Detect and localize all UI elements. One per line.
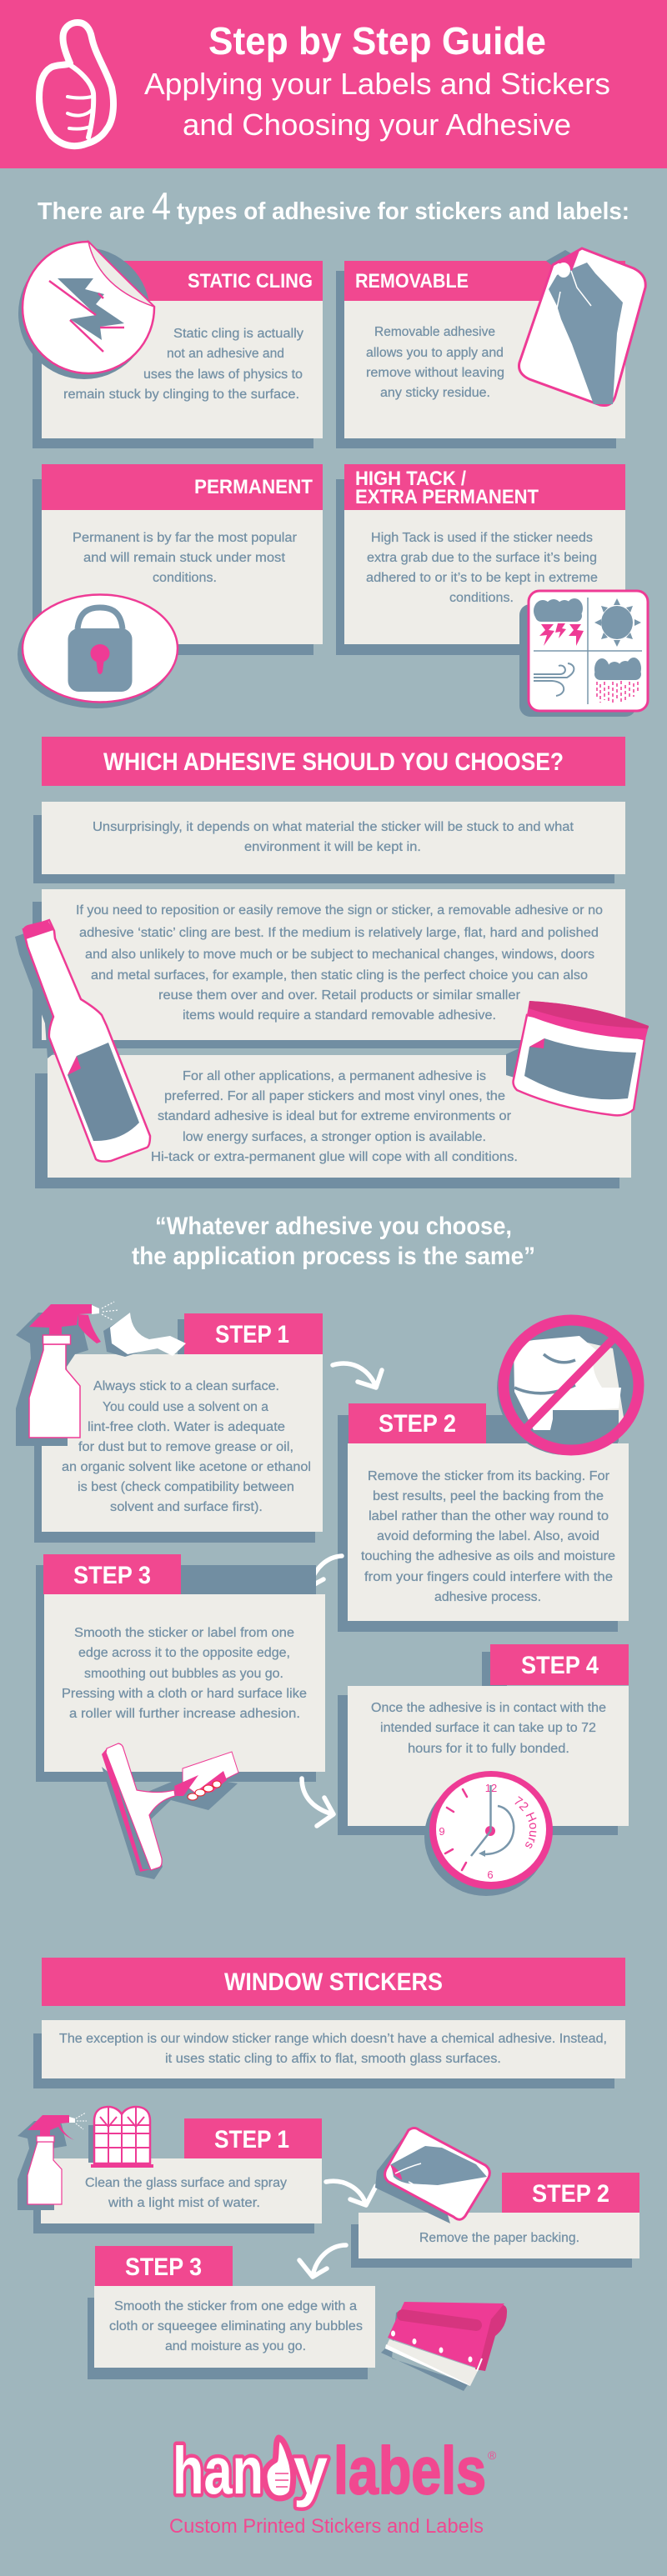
icon: cloth — [103, 1313, 186, 1357]
text: step 2: Remove the sticker from its backing. For — [368, 1469, 609, 1483]
heading: high tack — [355, 468, 539, 508]
text: step 2: adhesive process. — [434, 1590, 541, 1604]
icon: bottle — [15, 920, 150, 1162]
arrow: step 1 to 2 — [333, 1363, 382, 1388]
text: step 4 — [371, 1701, 606, 1756]
text: window step 2: Remove the paper backing. — [419, 2231, 579, 2245]
quote — [132, 1213, 535, 1270]
panel: step 3 — [36, 1554, 325, 1879]
heading: four types: There are — [38, 198, 145, 225]
text: step 3: a roller will further increase adhesion. — [69, 1707, 300, 1721]
text: window step 1 — [85, 2176, 287, 2210]
icon: small spray bottle — [18, 2113, 87, 2210]
text: step 2 — [361, 1469, 615, 1604]
heading: high tack: HIGH TACK / — [355, 468, 466, 490]
text: high tack: conditions. — [449, 591, 514, 605]
text: permanent: and will remain stuck under most — [83, 551, 286, 565]
text: removable: allows you to apply and — [366, 346, 504, 360]
panel: unsurprisingly — [33, 802, 625, 883]
heading: high tack: EXTRA PERMANENT — [355, 486, 539, 508]
text: step 3: smoothing out bubbles as you go. — [84, 1667, 283, 1681]
text: window step 3: Smooth the sticker from one edge with a — [114, 2299, 357, 2313]
text: removable: Removable adhesive — [374, 325, 495, 339]
icon: arched window — [88, 2107, 153, 2168]
arrow: step 2 to 3 — [294, 1556, 342, 1588]
text: static cling: remain stuck by clinging to the surface. — [63, 388, 299, 402]
panel: window sticker exception: it uses static cling to affix to flat, smooth glass surfaces. — [165, 2052, 501, 2066]
panel: permanent guidance: standard adhesive is ideal but for extreme environments or — [158, 1109, 511, 1123]
panel: permanent — [18, 464, 323, 708]
arrow: step 3 to 4 — [302, 1778, 334, 1826]
text: removable — [366, 325, 504, 400]
text: static cling: not an adhesive and — [167, 347, 284, 361]
icon: spray bottle — [16, 1302, 118, 1446]
logo: handy labels: ® — [488, 2448, 497, 2462]
text: removable: remove without leaving — [366, 366, 504, 380]
panel: unsurprisingly: Unsurprisingly, it depends on what material the sticker will be stuck to and what — [93, 820, 574, 834]
panel: window step 2 — [351, 2128, 639, 2268]
heading: window step 2: STEP 2 — [532, 2180, 609, 2208]
text: step 3: Pressing with a cloth or hard surface like — [62, 1687, 307, 1701]
icon: clock 72 hours: 72 Hours — [514, 1796, 537, 1848]
text: step 2: avoid deforming the label. Also, avoid — [377, 1529, 599, 1543]
text: step 1: an organic solvent like acetone or ethanol — [62, 1460, 311, 1474]
section heading: which adhesive: WHICH ADHESIVE SHOULD YOU CHOOSE? — [103, 748, 564, 776]
icon: storm — [534, 598, 584, 646]
icon: squeegee and hand — [102, 1743, 238, 1879]
panel: permanent guidance — [35, 1055, 631, 1188]
logo: handy labels — [173, 2433, 497, 2508]
heading: window step 3: STEP 3 — [125, 2253, 202, 2281]
title — [144, 19, 610, 142]
text: static cling: Static cling is actually — [173, 327, 303, 341]
heading: step 4: STEP 4 — [521, 1652, 599, 1679]
section heading: window stickers — [42, 1958, 625, 2006]
text: step 1: for dust but to remove grease or oil, — [78, 1440, 293, 1454]
arrow: window step 1 to 2 — [326, 2181, 376, 2205]
text: step 3: Smooth the sticker or label from one — [74, 1626, 294, 1640]
text: step 1 — [62, 1379, 311, 1514]
panel: step 4 — [338, 1644, 629, 1896]
panel: removable guidance: and also unlikely to move much or be subject to mechanical changes, windows, doors — [85, 948, 594, 962]
text: step 1: You could use a solvent on a — [103, 1400, 268, 1414]
icon: logo thumb — [264, 2438, 293, 2498]
tagline: Custom Printed Stickers and Labels — [169, 2515, 484, 2538]
panel: window step 3 — [88, 2246, 375, 2379]
text: step 4: intended surface it can take up to 72 — [380, 1721, 596, 1735]
text: permanent: conditions. — [153, 571, 217, 585]
panel: removable guidance: items would require a standard removable adhesive. — [183, 1008, 496, 1023]
text: window step 1: with a light mist of water. — [108, 2196, 260, 2210]
panel: permanent guidance: For all other applications, a permanent adhesive is — [183, 1069, 486, 1083]
text: high tack: High Tack is used if the sticker needs — [371, 531, 593, 545]
section heading: which adhesive — [42, 737, 625, 786]
heading: step 2: STEP 2 — [379, 1410, 456, 1438]
panel: removable guidance: reuse them over and over. Retail products or similar smaller — [158, 988, 520, 1003]
icon: extreme weather — [519, 591, 648, 717]
text: permanent: Permanent is by far the most popular — [73, 531, 297, 545]
text: permanent — [73, 531, 297, 585]
icon: padlock — [18, 595, 178, 708]
text: high tack: adhered to or it’s to be kept in extreme — [366, 571, 598, 585]
icon: clock 72 hours: 12 — [485, 1782, 497, 1794]
text: step 2: from your fingers could interfere with the — [364, 1570, 613, 1584]
text: step 2: label rather than the other way round to — [369, 1509, 609, 1523]
logo: handy labels: han — [173, 2433, 263, 2508]
quote: the application process is the same” — [132, 1243, 535, 1270]
icon: clock 72 hours: 9 — [439, 1825, 445, 1838]
panel: unsurprisingly: environment it will be kept in. — [244, 840, 421, 854]
text: step 1: solvent and surface first). — [110, 1500, 263, 1514]
icon: clock 72 hours — [424, 1771, 553, 1896]
icon: clock 72 hours: 6 — [487, 1868, 494, 1881]
header banner — [0, 0, 667, 168]
panel: high tack — [336, 464, 648, 717]
panel: permanent guidance: preferred. For all paper stickers and most vinyl ones, the — [164, 1089, 505, 1103]
heading: permanent: PERMANENT — [194, 476, 313, 498]
text: step 4: hours for it to fully bonded. — [408, 1742, 569, 1756]
icon: jar — [506, 1001, 649, 1115]
panel: removable guidance: adhesive ‘static’ cling are best. If the medium is relatively large, flat, hard and polished — [79, 926, 599, 940]
text: window step 3 — [109, 2299, 363, 2353]
panel: removable guidance: and metal surfaces, for example, then static cling is the perfect choice you can also — [91, 968, 588, 983]
text: step 1: is best (check compatibility between — [78, 1480, 294, 1494]
title: and Choosing your Adhesive — [183, 108, 571, 142]
icon: hand on backing — [375, 2128, 489, 2223]
heading: four types — [38, 184, 629, 228]
heading: four types: types of adhesive for stickers and labels: — [177, 198, 629, 225]
panel: static cling — [18, 242, 323, 448]
heading: step 3: STEP 3 — [73, 1562, 151, 1589]
panel: window sticker exception — [33, 2020, 625, 2088]
icon: do not touch adhesive — [497, 1320, 639, 1455]
text: step 2: touching the adhesive as oils and moisture — [361, 1549, 615, 1563]
panel: removable guidance — [33, 889, 625, 1048]
logo: handy labels: y — [293, 2433, 328, 2508]
text: step 3 — [62, 1626, 307, 1721]
panel: step 2 — [338, 1320, 639, 1632]
panel: permanent guidance: Hi-tack or extra-permanent glue will cope with all conditions. — [151, 1150, 518, 1164]
icon: squeegee tool — [381, 2302, 507, 2391]
heading: step 1: STEP 1 — [215, 1321, 289, 1348]
text: window step 1: Clean the glass surface and spray — [85, 2176, 287, 2190]
text: step 2: best results, peel the backing from the — [373, 1489, 604, 1503]
text: high tack — [366, 531, 598, 605]
panel: removable guidance: If you need to reposition or easily remove the sign or sticker, a removable adhesive or no — [76, 903, 603, 918]
title: Step by Step Guide — [208, 19, 546, 63]
heading: window step 1: STEP 1 — [214, 2126, 289, 2153]
heading: removable: REMOVABLE — [355, 270, 469, 293]
panel: permanent guidance: low energy surfaces, a stronger option is available. — [183, 1130, 486, 1144]
icon: peeling static sticker — [18, 242, 154, 379]
panel: removable — [336, 248, 645, 448]
heading: four types: 4 — [152, 184, 171, 228]
icon: thumbs up — [39, 23, 113, 146]
text: high tack: extra grab due to the surface it’s being — [367, 551, 597, 565]
text: removable: any sticky residue. — [380, 386, 490, 400]
title: Applying your Labels and Stickers — [144, 67, 610, 101]
text: window step 3: and moisture as you go. — [165, 2339, 306, 2353]
panel: window step 1 — [18, 2107, 322, 2233]
section heading: window stickers: WINDOW STICKERS — [224, 1968, 443, 1996]
text: step 3: edge across it to the opposite edge, — [78, 1646, 290, 1660]
heading: static cling: STATIC CLING — [188, 270, 313, 293]
logo: handy labels: labels — [334, 2433, 486, 2508]
panel: window sticker exception: The exception is our window sticker range which doesn’t have a chemical adhesive. Instead, — [59, 2032, 607, 2046]
text: step 4: Once the adhesive is in contact with the — [371, 1701, 606, 1715]
text: step 1: lint-free cloth. Water is adequate — [88, 1420, 285, 1434]
text: static cling — [63, 327, 303, 402]
icon: rain — [594, 658, 641, 704]
arrow: window step 2 to 3 — [299, 2245, 346, 2277]
text: static cling: uses the laws of physics to — [143, 368, 303, 382]
icon: sun — [594, 598, 641, 647]
icon: wind — [534, 663, 574, 696]
icon: hand peeling sticker — [519, 248, 645, 406]
quote: “Whatever adhesive you choose, — [155, 1213, 512, 1240]
panel: step 1 — [16, 1302, 323, 1543]
text: window step 3: cloth or squeegee eliminating any bubbles — [109, 2319, 363, 2333]
text: step 1: Always stick to a clean surface. — [93, 1379, 279, 1393]
